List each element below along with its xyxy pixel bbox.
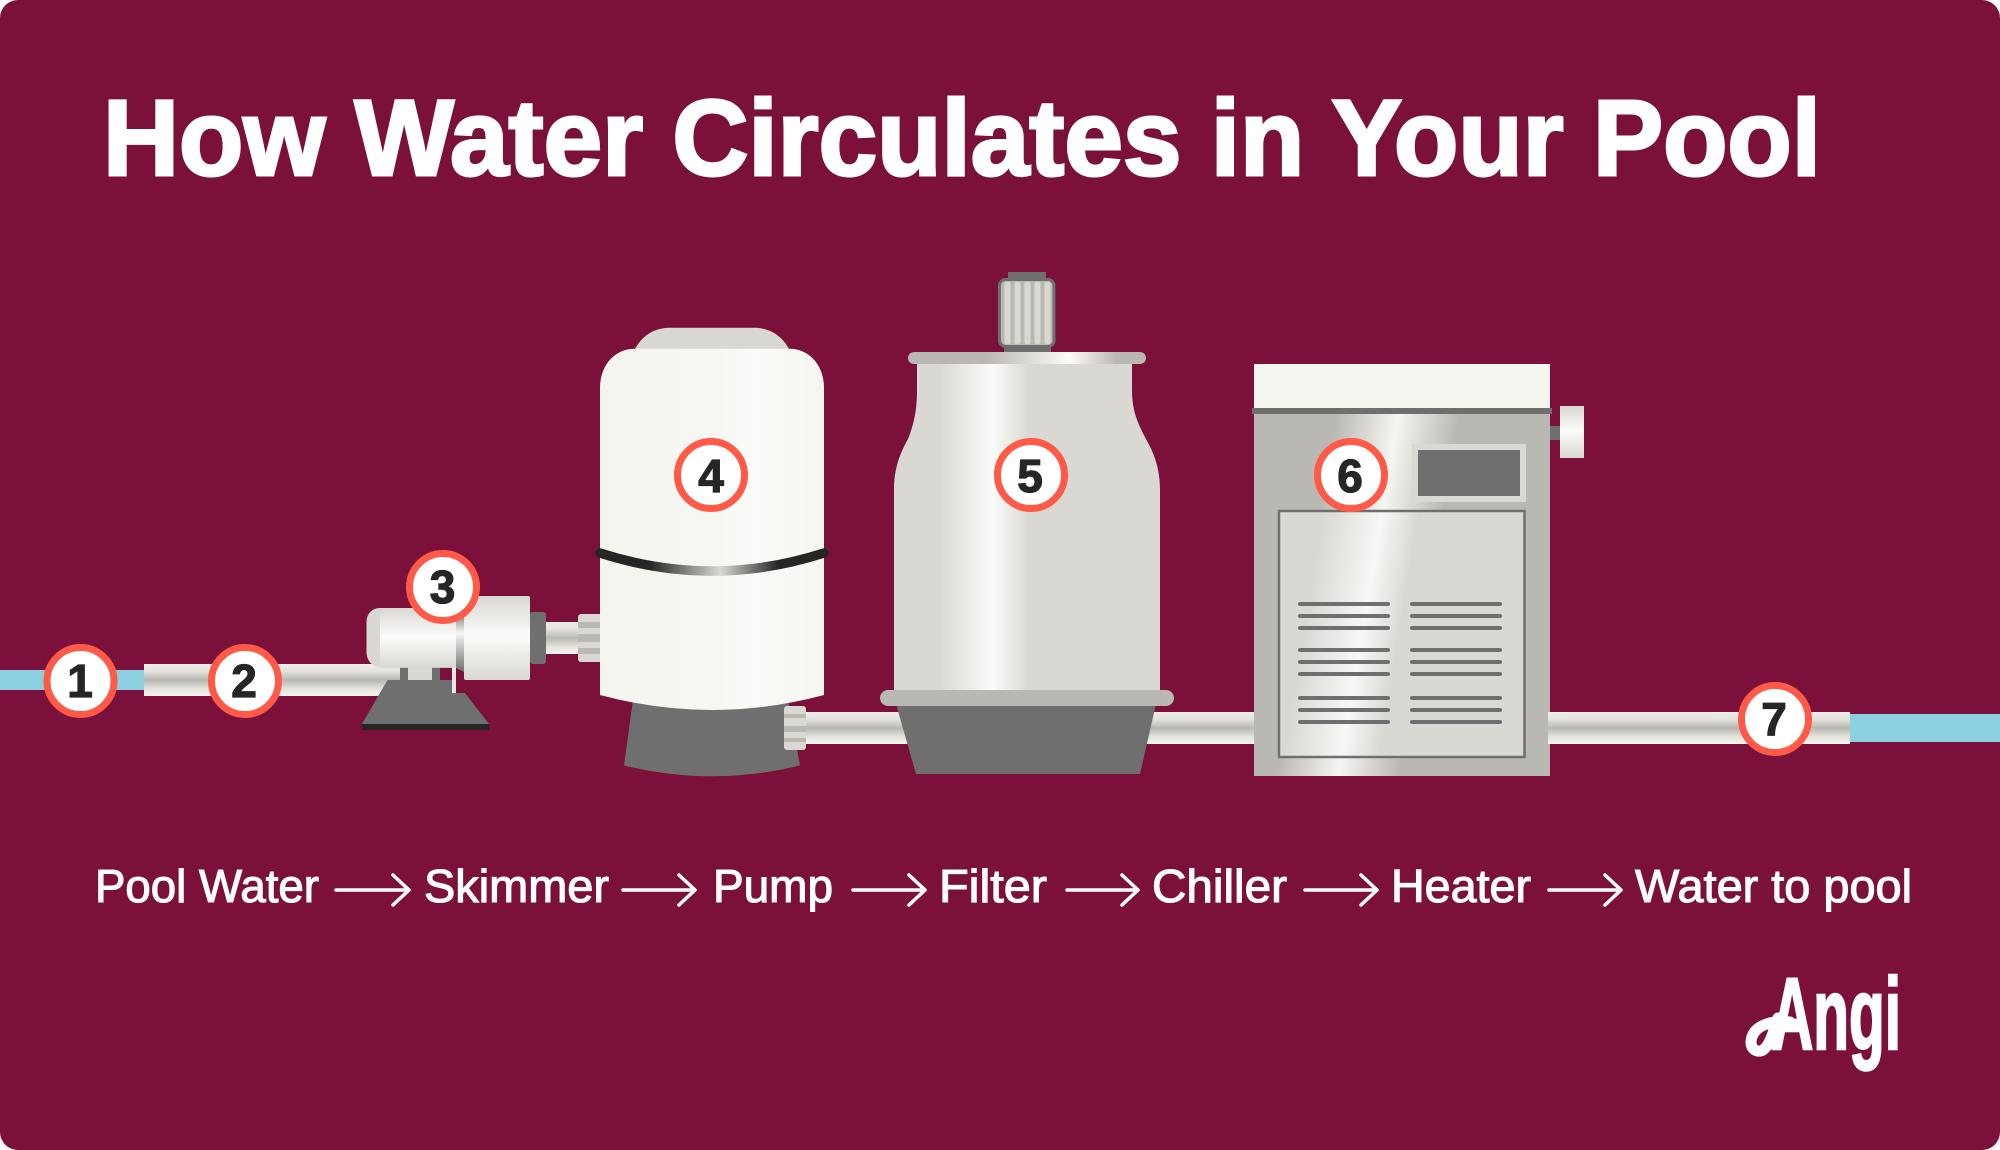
marker 3: 3 — [430, 561, 455, 613]
Angi logo — [1751, 957, 1901, 1071]
label: filter: Filter — [939, 860, 1047, 912]
pump outlet — [530, 612, 604, 664]
filter tank — [600, 328, 902, 776]
logo swash — [1751, 1018, 1790, 1051]
chiller stand — [896, 704, 1156, 774]
marker 5: 5 — [1017, 450, 1043, 502]
marker 4: 4 — [698, 450, 724, 502]
heater knob — [1550, 406, 1584, 458]
heater display — [1412, 444, 1526, 502]
arrow — [853, 875, 925, 905]
marker 7 — [1742, 686, 1808, 752]
marker 4 — [678, 442, 744, 508]
chiller knob — [1000, 272, 1054, 354]
heater top — [1254, 364, 1550, 408]
label: chiller: Chiller — [1152, 860, 1287, 912]
marker 2: 2 — [231, 655, 257, 707]
marker 1 — [47, 648, 114, 714]
logo wordmark: Angi — [1771, 957, 1901, 1071]
filter dome — [635, 328, 789, 349]
marker 6: 6 — [1337, 450, 1363, 502]
heater vents — [1298, 602, 1502, 724]
filter band — [600, 553, 824, 571]
chiller — [880, 272, 1174, 774]
chiller body — [894, 364, 1160, 692]
water inlet — [0, 670, 146, 690]
heater band — [1252, 408, 1552, 414]
marker 3 — [410, 554, 476, 620]
label: heater: Heater — [1391, 860, 1531, 912]
filter base — [624, 700, 800, 776]
marker 6 — [1318, 442, 1384, 508]
arrow — [623, 875, 695, 905]
marker 5 — [998, 442, 1064, 508]
heater body — [1254, 410, 1550, 776]
water outlet — [1850, 714, 2000, 742]
arrow — [1549, 875, 1621, 905]
marker 2 — [212, 648, 278, 714]
filter outlet nut — [784, 706, 806, 750]
arrow — [1067, 875, 1138, 905]
label: skimmer: Skimmer — [424, 860, 609, 912]
process flow labels — [95, 860, 1912, 912]
pump base — [362, 666, 489, 730]
label: pump: Pump — [713, 860, 833, 912]
pipe segment — [806, 712, 902, 744]
arrow — [336, 875, 409, 905]
label: pool water: Pool Water — [95, 860, 319, 912]
marker 7: 7 — [1761, 693, 1787, 745]
chiller ring — [880, 690, 1174, 706]
inlet pipe — [144, 664, 400, 696]
label: water to pool: Water to pool — [1635, 860, 1912, 912]
marker 1: 1 — [67, 655, 93, 707]
main pipe from filter to heater — [800, 712, 1260, 744]
title: How Water Circulates in Your Pool — [103, 77, 1821, 198]
heater panel — [1279, 511, 1524, 757]
pump motor — [366, 596, 530, 680]
arrow — [1305, 875, 1377, 905]
heater — [1252, 364, 1584, 776]
return pipe — [1548, 712, 1850, 744]
filter body — [600, 349, 824, 710]
chiller lid — [908, 352, 1146, 364]
pump — [362, 596, 604, 730]
